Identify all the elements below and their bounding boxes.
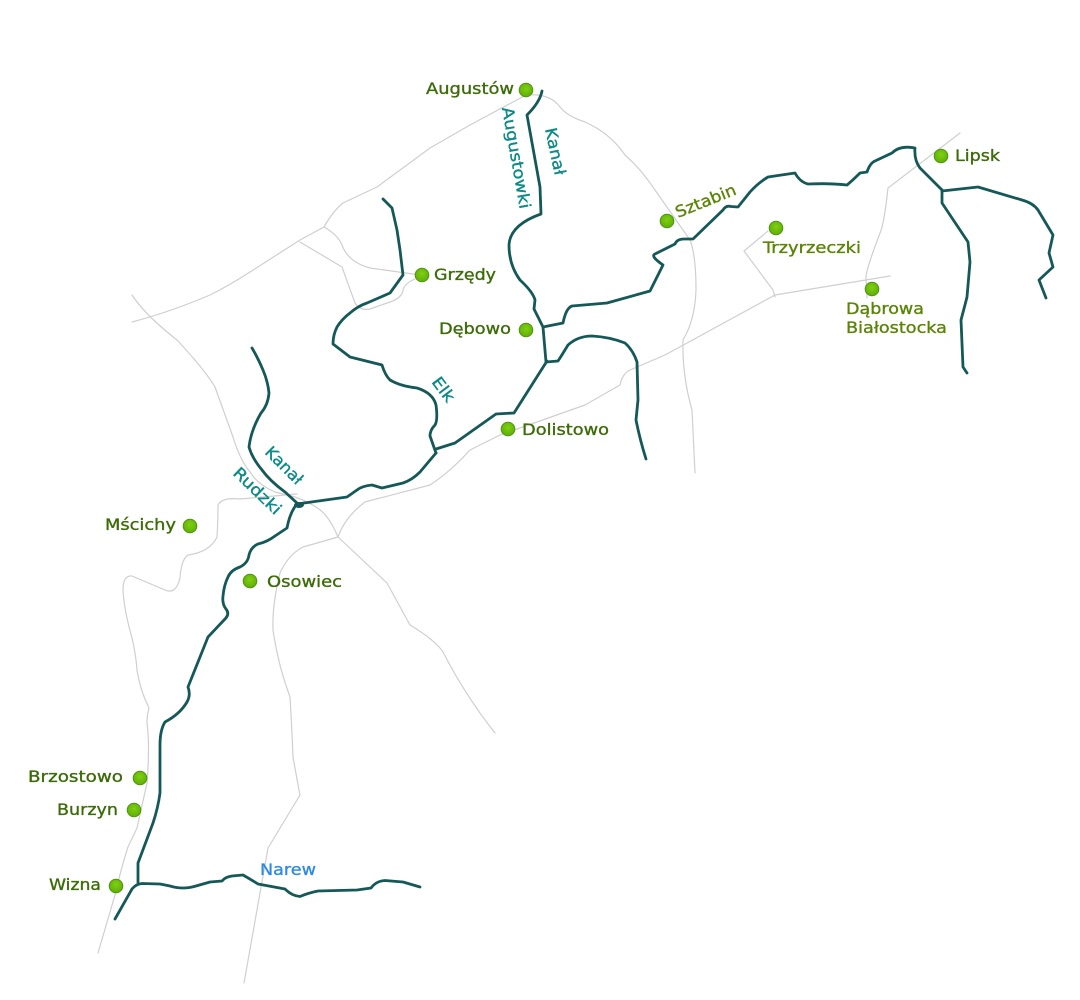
river labels: Kanał bbox=[541, 126, 570, 177]
town: Mścichy bbox=[105, 515, 197, 534]
town: Mścichy: Mścichy bbox=[105, 515, 176, 534]
town: Dębowo: Dębowo bbox=[439, 319, 511, 338]
river labels: Elk bbox=[428, 373, 460, 407]
town: Dąbrowa Białostocka bbox=[846, 282, 947, 337]
town: Dębowo bbox=[439, 319, 533, 338]
rivers bbox=[115, 91, 1053, 919]
town: Wizna: Wizna bbox=[49, 875, 101, 894]
river labels bbox=[229, 105, 570, 879]
town: Brzostowo: Brzostowo bbox=[28, 767, 123, 786]
town: Osowiec bbox=[243, 572, 342, 591]
town: Trzyrzeczki: Trzyrzeczki bbox=[762, 238, 861, 257]
town: Lipsk bbox=[934, 146, 1001, 165]
town: Dąbrowa Białostocka: Białostocka bbox=[846, 318, 947, 337]
town: Sztabin bbox=[660, 180, 739, 228]
river labels: Narew bbox=[260, 860, 316, 879]
town: Burzyn: Burzyn bbox=[57, 800, 118, 819]
river labels: Rudzki bbox=[229, 463, 286, 519]
river labels: Kanał bbox=[261, 442, 307, 489]
town: Brzostowo bbox=[28, 767, 147, 786]
town: Osowiec: Osowiec bbox=[267, 572, 342, 591]
town: Burzyn bbox=[57, 800, 141, 819]
town: Dolistowo: Dolistowo bbox=[522, 420, 609, 439]
town: Lipsk: Lipsk bbox=[955, 146, 1001, 165]
town: Sztabin: Sztabin bbox=[672, 180, 739, 222]
town: Grzędy: Grzędy bbox=[434, 265, 496, 284]
town: Augustów: Augustów bbox=[426, 79, 514, 98]
roads bbox=[98, 95, 960, 983]
town: Dąbrowa Białostocka: Dąbrowa bbox=[846, 299, 924, 318]
river labels: Augustowki bbox=[498, 105, 535, 210]
town: Trzyrzeczki bbox=[762, 221, 861, 257]
town: Wizna bbox=[49, 875, 123, 894]
